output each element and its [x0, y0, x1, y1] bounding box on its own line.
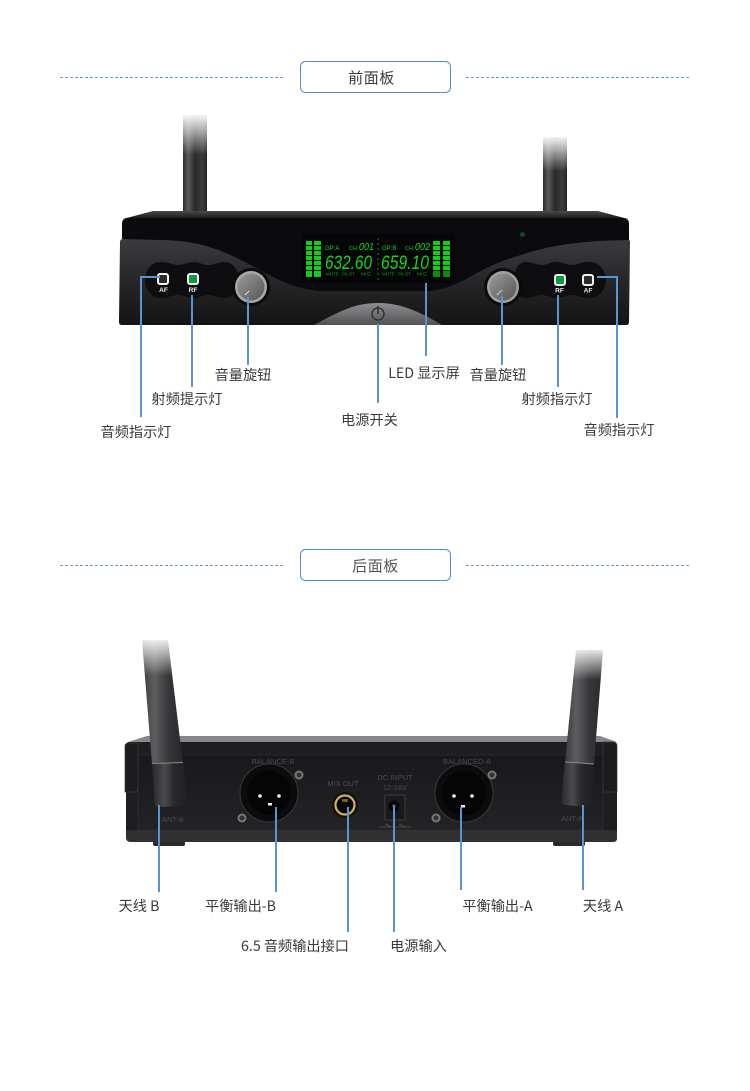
- 6.5 audio jack: [332, 792, 358, 818]
- port labels: [162, 757, 583, 824]
- callout: left audio indicator: 音频指示灯: [101, 422, 171, 442]
- right indicator cluster: RF: [555, 288, 564, 294]
- callout: power input: 电源输入: [390, 936, 447, 956]
- right indicator cluster: [514, 262, 606, 298]
- left indicator cluster: RF: [189, 287, 197, 294]
- callout: LED display: [388, 283, 460, 383]
- icon: rear antenna B: [138, 636, 188, 807]
- port labels: BALANCED-A: [443, 757, 491, 766]
- callout: balanced output B: [205, 807, 276, 916]
- LED display: 001: [359, 242, 374, 253]
- heading: rear panel: 后面板: [352, 555, 399, 576]
- port labels: DC INPUT: [377, 773, 413, 782]
- LED display: CH: [405, 246, 413, 252]
- callout: antenna A: [583, 805, 623, 916]
- LED display: MUTE: [326, 272, 339, 276]
- heading: rear panel: [60, 550, 689, 580]
- LED display: MHZ: [361, 272, 371, 276]
- LED display: 659.10: [381, 253, 429, 274]
- callout: right audio indicator: [584, 277, 654, 440]
- right indicator cluster: AF: [584, 288, 592, 294]
- callout: left RF indicator: [152, 295, 222, 409]
- left volume knob: [232, 268, 270, 306]
- LED display: MUTE: [382, 272, 395, 276]
- left indicator cluster: AF: [159, 287, 168, 294]
- front receiver body: [119, 211, 630, 325]
- section: rear panel: [60, 550, 689, 956]
- port labels: ANT-A: [561, 814, 583, 823]
- LED display: 002: [415, 242, 430, 253]
- callout: left audio indicator: [101, 277, 171, 442]
- port labels: BALANCE-B: [252, 757, 294, 766]
- callout: right audio indicator: 音频指示灯: [584, 420, 654, 440]
- callout: antenna B: [119, 805, 159, 916]
- LED display: PILOT: [398, 272, 411, 276]
- LED display: GP:A: [325, 246, 339, 252]
- icon: front antenna left: [181, 113, 209, 216]
- heading: front panel: 前面板: [348, 67, 395, 88]
- callout: right volume knob: [470, 296, 526, 385]
- port labels: ANT-B: [162, 815, 184, 824]
- XLR connector B: [238, 764, 304, 822]
- LED display: MHZ: [417, 272, 427, 276]
- LED display: PILOT: [342, 272, 355, 276]
- callout: power switch: 电源开关: [341, 410, 398, 430]
- XLR connector A: [432, 764, 496, 822]
- callout: right RF indicator: [522, 295, 592, 409]
- left indicator cluster: [145, 262, 240, 298]
- LED display: [302, 234, 455, 283]
- power button: [314, 303, 442, 325]
- callout: antenna A: 天线 A: [583, 896, 623, 916]
- icon: rear antenna A: [561, 646, 608, 807]
- callout: LED display: LED 显示屏: [388, 363, 460, 383]
- right volume knob: [484, 268, 522, 306]
- callout: right volume knob: 音量旋钮: [470, 365, 526, 385]
- callout: balanced output A: [461, 807, 533, 916]
- port labels: 12-18V: [383, 783, 407, 792]
- heading: front panel: [60, 62, 689, 92]
- rear receiver body: [125, 636, 617, 846]
- callout: left RF indicator: 射频提示灯: [152, 389, 222, 409]
- LED display: CH: [349, 246, 357, 252]
- callout: 6.5 audio output: 6.5 音频输出接口: [241, 936, 349, 956]
- LED display: GP:B: [382, 246, 396, 252]
- LED display: 632.60: [325, 253, 372, 274]
- callout: left volume knob: 音量旋钮: [215, 365, 271, 385]
- section: front panel: [60, 62, 689, 442]
- callout: power switch: [341, 324, 398, 430]
- icon: front antenna right: [541, 135, 569, 216]
- callout: antenna B: 天线 B: [119, 896, 159, 916]
- callout: right RF indicator: 射频指示灯: [522, 389, 592, 409]
- callout: balanced output A: 平衡输出-A: [462, 896, 533, 916]
- callout: balanced output B: 平衡输出-B: [205, 896, 276, 916]
- DC power input: [379, 795, 411, 827]
- callout: left volume knob: [215, 297, 271, 385]
- port labels: MIX OUT: [327, 779, 359, 788]
